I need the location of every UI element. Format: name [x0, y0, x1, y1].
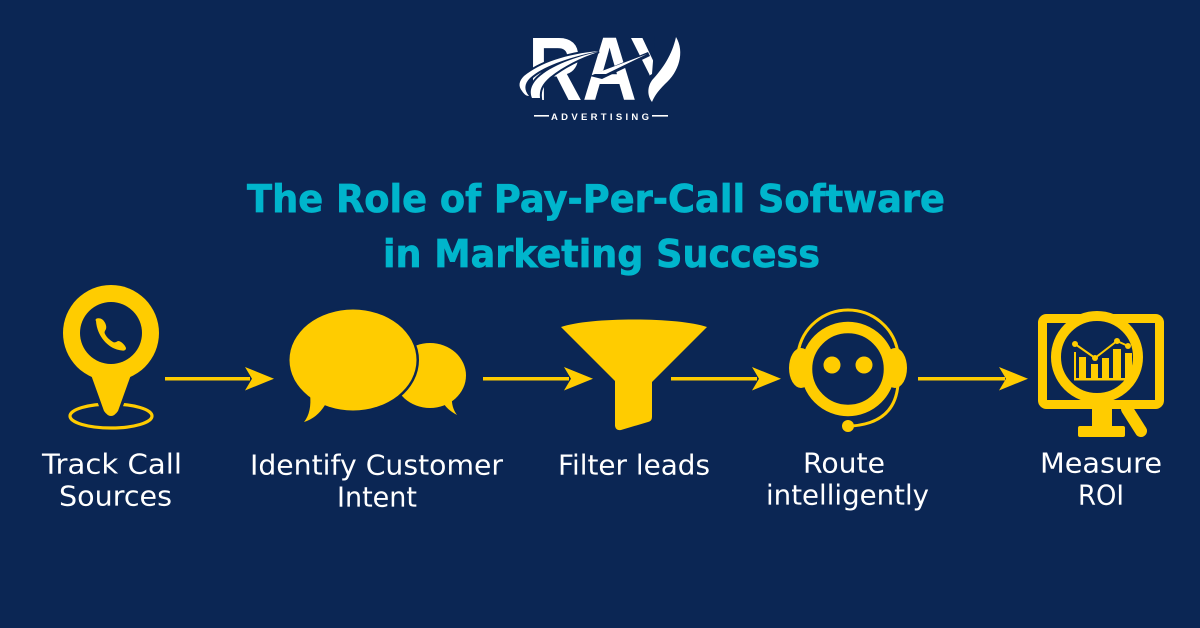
arrow 3: [671, 367, 781, 390]
label: Identify Customer: [250, 450, 504, 482]
icon: speech bubbles: [287, 307, 466, 422]
icon: location pin with phone: [63, 285, 159, 428]
label: Filter leads: [558, 450, 710, 482]
label: Track Call: [41, 448, 182, 480]
label: [766, 448, 929, 512]
label: [250, 450, 504, 514]
step 3: Filter leads: [558, 320, 710, 482]
label: Measure: [1040, 448, 1162, 480]
label: Route: [803, 448, 885, 480]
label: Sources: [59, 480, 172, 512]
icon: funnel: [561, 320, 707, 430]
icon: monitor with magnifier and chart: [1042, 316, 1160, 437]
step 5: Measure ROI: [1040, 316, 1162, 512]
label: intelligently: [766, 480, 929, 512]
label: ROI: [1078, 480, 1124, 512]
label: [1040, 448, 1162, 512]
title: in Marketing Success: [383, 232, 820, 277]
step 1: Track Call Sources: [41, 285, 182, 512]
arrow 1: [165, 367, 274, 390]
arrow 2: [483, 367, 593, 390]
label: [41, 448, 182, 512]
step 2: Identify Customer Intent: [250, 307, 504, 514]
logo: Ray Advertising: RAY: [528, 20, 680, 120]
logo tagline: ADVERTISING: [551, 112, 649, 123]
arrow 4: [918, 367, 1028, 390]
step 4: Route intelligently: [766, 310, 929, 512]
label: Intent: [337, 482, 417, 514]
icon: headset face: [789, 310, 907, 432]
title: The Role of Pay-Per-Call Software: [247, 177, 945, 222]
title: [247, 177, 945, 277]
